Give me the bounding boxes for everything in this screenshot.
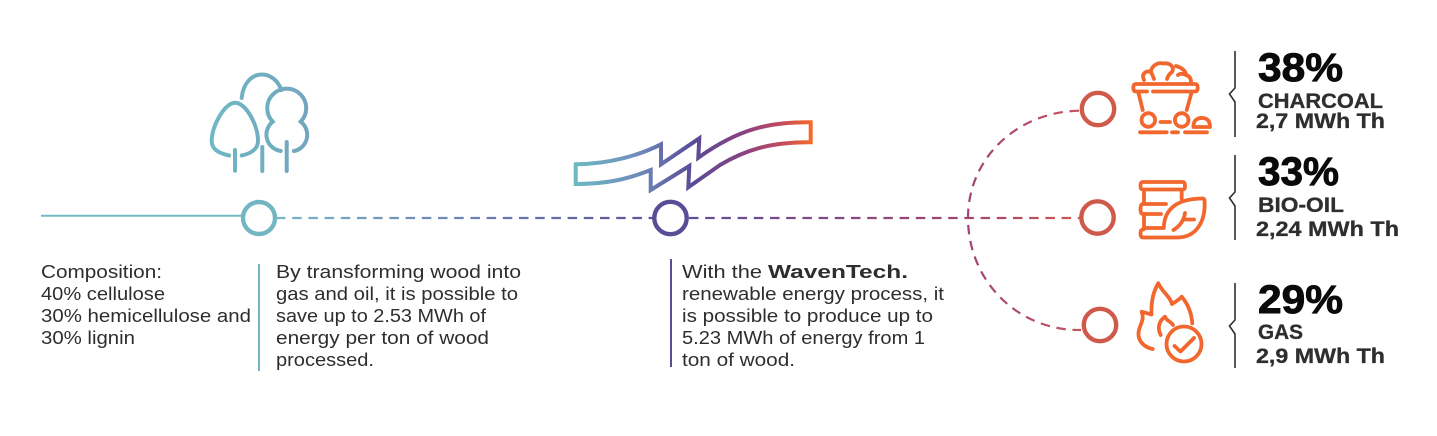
text: WavenTech process: is possible to produce up to [682,306,933,326]
brace: bio-oil [1230,155,1235,240]
node: bio-oil [1081,201,1114,234]
dashed line: wood to process [276,217,654,219]
text: composition [41,262,251,348]
stat: bio-oil: BIO-OIL [1258,194,1344,217]
icon: coal cart [1133,63,1210,132]
stat: gas [1256,278,1385,368]
brace: charcoal [1230,51,1235,137]
text: energy saved [276,262,521,370]
stat: charcoal: 2,7 MWh Th [1256,110,1385,133]
divider: teal [258,264,260,371]
stat: charcoal: 38% [1258,46,1343,90]
brace: gas [1230,283,1235,368]
text: WavenTech process: renewable energy process, it [682,284,944,304]
text: WavenTech process: ton of wood. [682,350,795,370]
icon: bio-oil barrel with leaf [1140,182,1205,238]
text: composition: Composition: [41,262,162,282]
text: composition: 30% lignin [41,328,135,348]
solid timeline start [41,215,244,217]
node: gas [1084,309,1116,341]
stat: bio-oil [1256,150,1399,241]
node: process [654,202,687,234]
icon: lightning bolt [576,122,811,190]
dashed line: process to products [689,217,1082,219]
text: composition: 30% hemicellulose and [41,306,251,326]
divider: purple [670,259,672,367]
text: energy saved: By transforming wood into [276,262,521,282]
icon: gas flame with check [1138,283,1202,362]
stat: bio-oil: 2,24 MWh Th [1256,218,1399,241]
text: energy saved: save up to 2.53 MWh of [276,306,487,326]
stat: charcoal [1256,46,1385,133]
text: WavenTech process: With the [682,262,762,282]
text: WavenTech process [682,262,944,370]
node: charcoal [1082,93,1114,125]
text: composition: 40% cellulose [41,284,165,304]
text: energy saved: energy per ton of wood [276,328,489,348]
stat: bio-oil: 33% [1258,150,1339,194]
stat: gas: 2,9 MWh Th [1256,345,1385,368]
stat: gas: GAS [1258,321,1303,344]
icon: trees [212,74,307,171]
stat: gas: 29% [1258,278,1343,322]
node: wood [243,202,275,234]
dashed arc: split to products [968,111,1081,330]
stat: charcoal: CHARCOAL [1258,90,1383,113]
text: WavenTech process: WavenTech. [768,262,908,282]
text: WavenTech process: 5.23 MWh of energy from 1 [682,328,925,348]
text: energy saved: processed. [276,350,374,370]
text: energy saved: gas and oil, it is possible to [276,284,518,304]
